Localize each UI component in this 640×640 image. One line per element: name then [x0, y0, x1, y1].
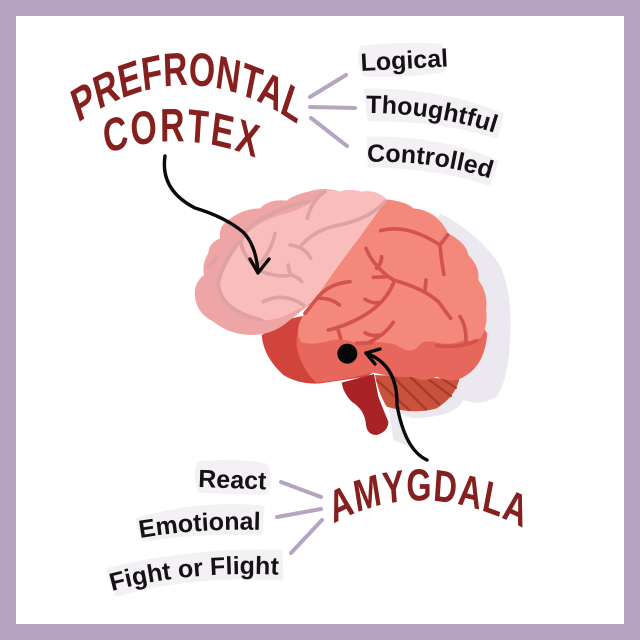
label group: prefrontal traits — [358, 43, 504, 186]
prefrontal light area — [218, 190, 387, 320]
heading: amygdala: AMYGDALA — [334, 469, 522, 528]
salmon lobe folds — [305, 229, 477, 346]
label: thoughtful: Thoughtful — [366, 95, 498, 132]
brain middle layer — [297, 280, 487, 383]
brainstem — [342, 374, 388, 435]
heading: prefrontal cortex: CORTEX — [104, 109, 260, 158]
label group: amygdala traits — [106, 460, 284, 596]
prefrontal outer band — [195, 189, 387, 335]
connector lines: prefrontal — [310, 75, 355, 146]
brain illustration — [195, 189, 511, 447]
amygdala dot — [337, 344, 357, 364]
prefrontal folds — [208, 192, 385, 320]
heading: prefrontal cortex: PREFRONTAL — [70, 53, 298, 124]
arrow: prefrontal cortex to brain — [164, 156, 269, 273]
arrow: amygdala label to dot — [366, 349, 427, 460]
label: react: React — [198, 465, 267, 495]
brain drop shadow — [380, 213, 511, 447]
cerebellum — [375, 375, 459, 411]
connector lines: amygdala — [277, 482, 322, 553]
heading: prefrontal cortex — [70, 53, 298, 158]
label: fight or flight: Fight or Flight — [109, 556, 279, 591]
label: controlled: Controlled — [368, 144, 494, 178]
brain dark lower layer — [262, 307, 413, 384]
label: emotional: Emotional — [139, 512, 260, 538]
label: logical: Logical — [360, 44, 449, 77]
parietal salmon lobe — [298, 199, 487, 350]
